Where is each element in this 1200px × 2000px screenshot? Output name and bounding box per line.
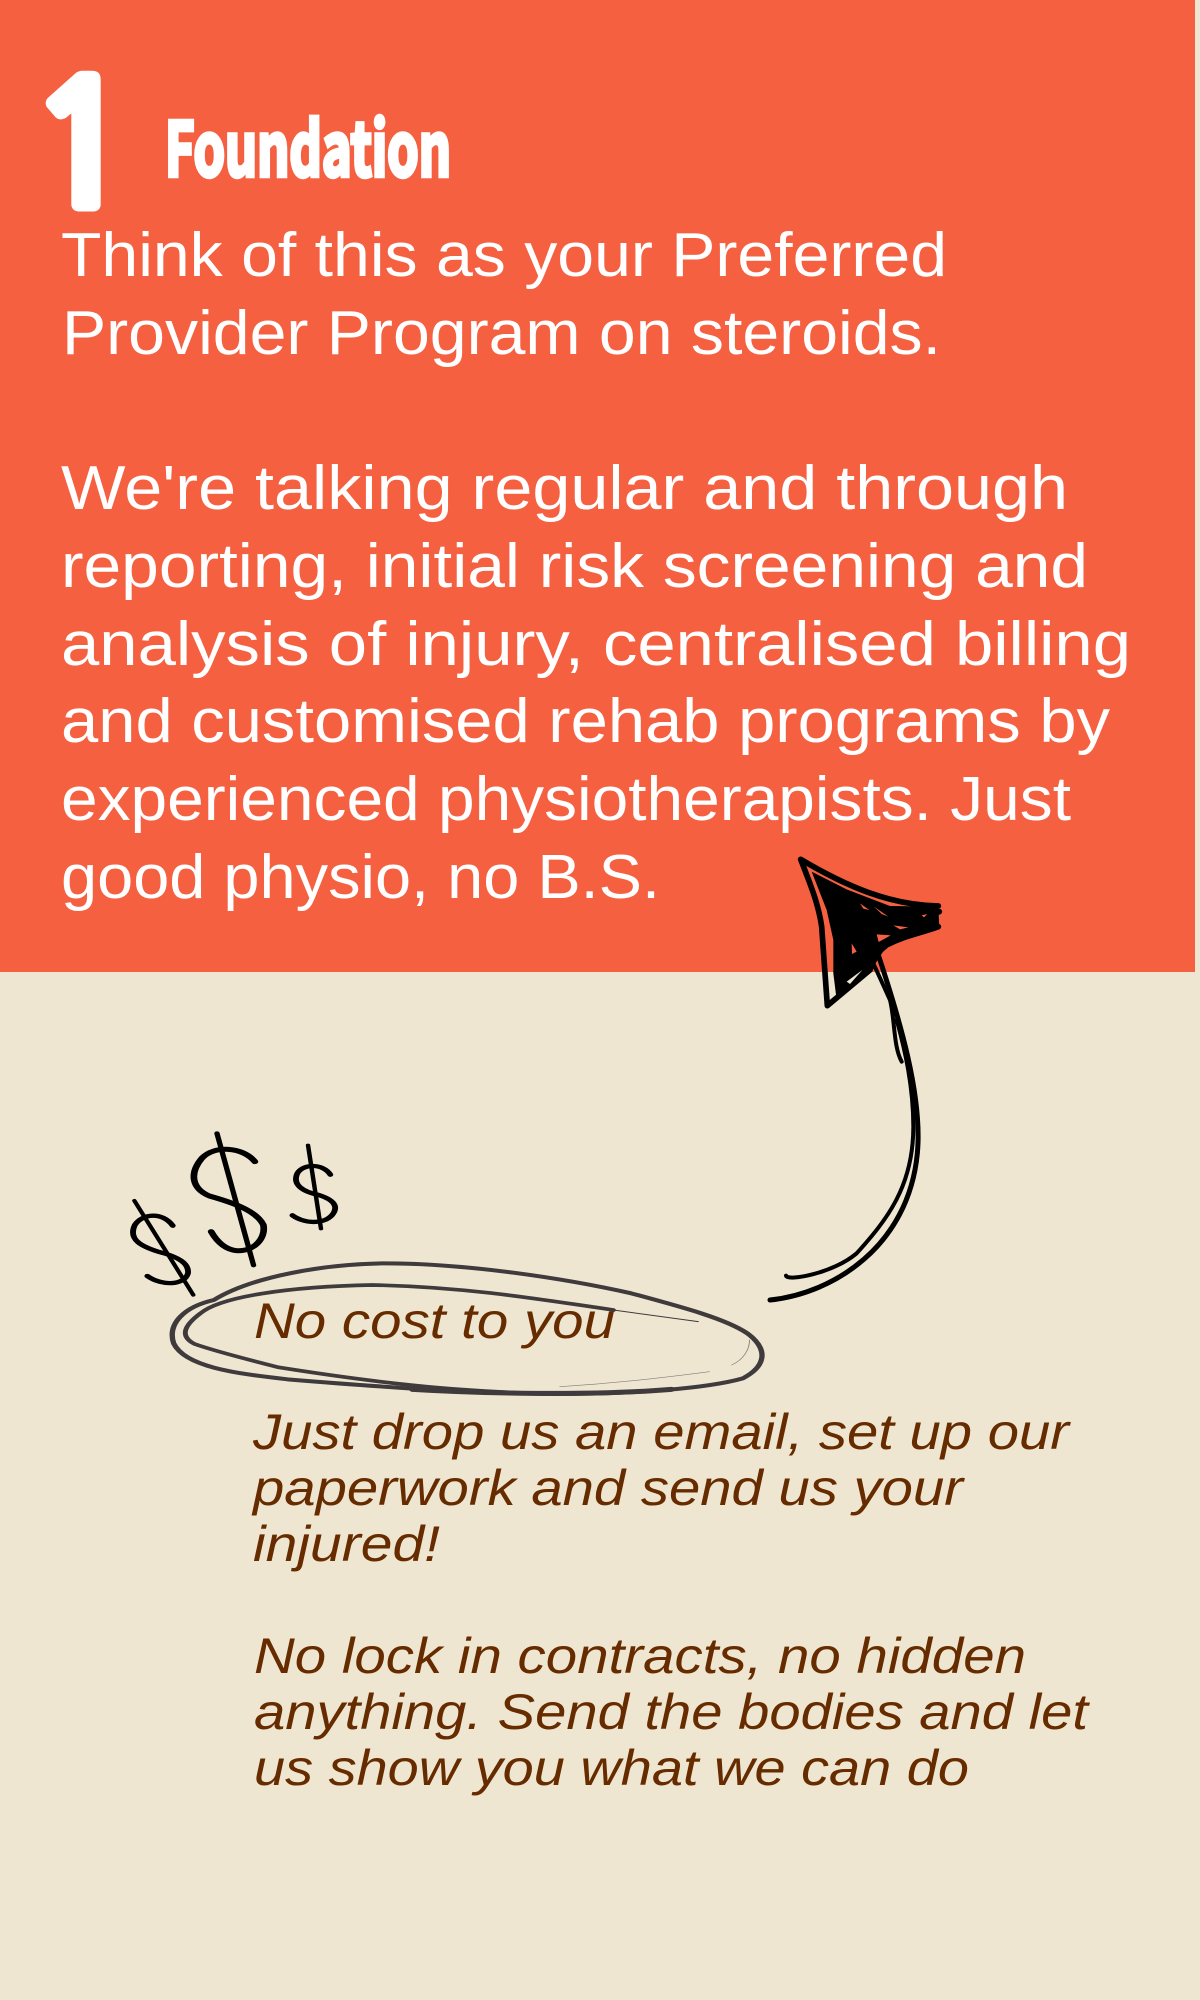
text block: details paragraph	[61, 454, 1131, 912]
text block: details paragraph: We're talking regular and through	[61, 454, 1068, 523]
icon: small left dollar	[133, 1201, 193, 1295]
text block: no lock in contracts	[254, 1628, 1090, 1796]
text block: details paragraph: experienced physiotherapists. Just	[61, 765, 1071, 834]
icon: dollar signs	[133, 1133, 335, 1295]
text block: details paragraph: reporting, initial risk screening and	[61, 532, 1088, 601]
text block: no lock in contracts: anything. Send the bodies and let	[254, 1684, 1090, 1740]
text block: email instructions	[251, 1404, 1072, 1572]
text block: no lock in contracts: No lock in contracts, no hidden	[254, 1628, 1026, 1684]
text block: details paragraph: and customised rehab programs by	[61, 687, 1110, 756]
panel: orange header background	[0, 0, 1195, 972]
heading: Foundation: Foundation	[165, 91, 451, 198]
text block: email instructions: paperwork and send us your	[251, 1460, 966, 1516]
text block: intro paragraph: Think of this as your Preferred	[61, 221, 947, 290]
text block: intro paragraph	[61, 221, 947, 368]
text block: details paragraph: analysis of injury, centralised billing	[61, 610, 1131, 679]
icon: large middle dollar	[194, 1133, 264, 1265]
text block: email instructions: injured!	[253, 1516, 440, 1572]
icon: small right dollar	[292, 1145, 335, 1229]
text block: no lock in contracts: us show you what we can do	[254, 1740, 969, 1796]
step number 1: 1	[28, 61, 136, 232]
callout: hand-drawn ellipse around No cost to you	[172, 1263, 762, 1394]
arrow: hand-drawn arrow pointing up to the panel	[770, 859, 939, 1300]
text block: email instructions: Just drop us an email, set up our	[252, 1404, 1072, 1460]
text block: details paragraph: good physio, no B.S.	[61, 843, 660, 912]
text block: intro paragraph: Provider Program on steroids.	[62, 299, 941, 368]
text block: no cost to you: No cost to you	[254, 1293, 615, 1349]
